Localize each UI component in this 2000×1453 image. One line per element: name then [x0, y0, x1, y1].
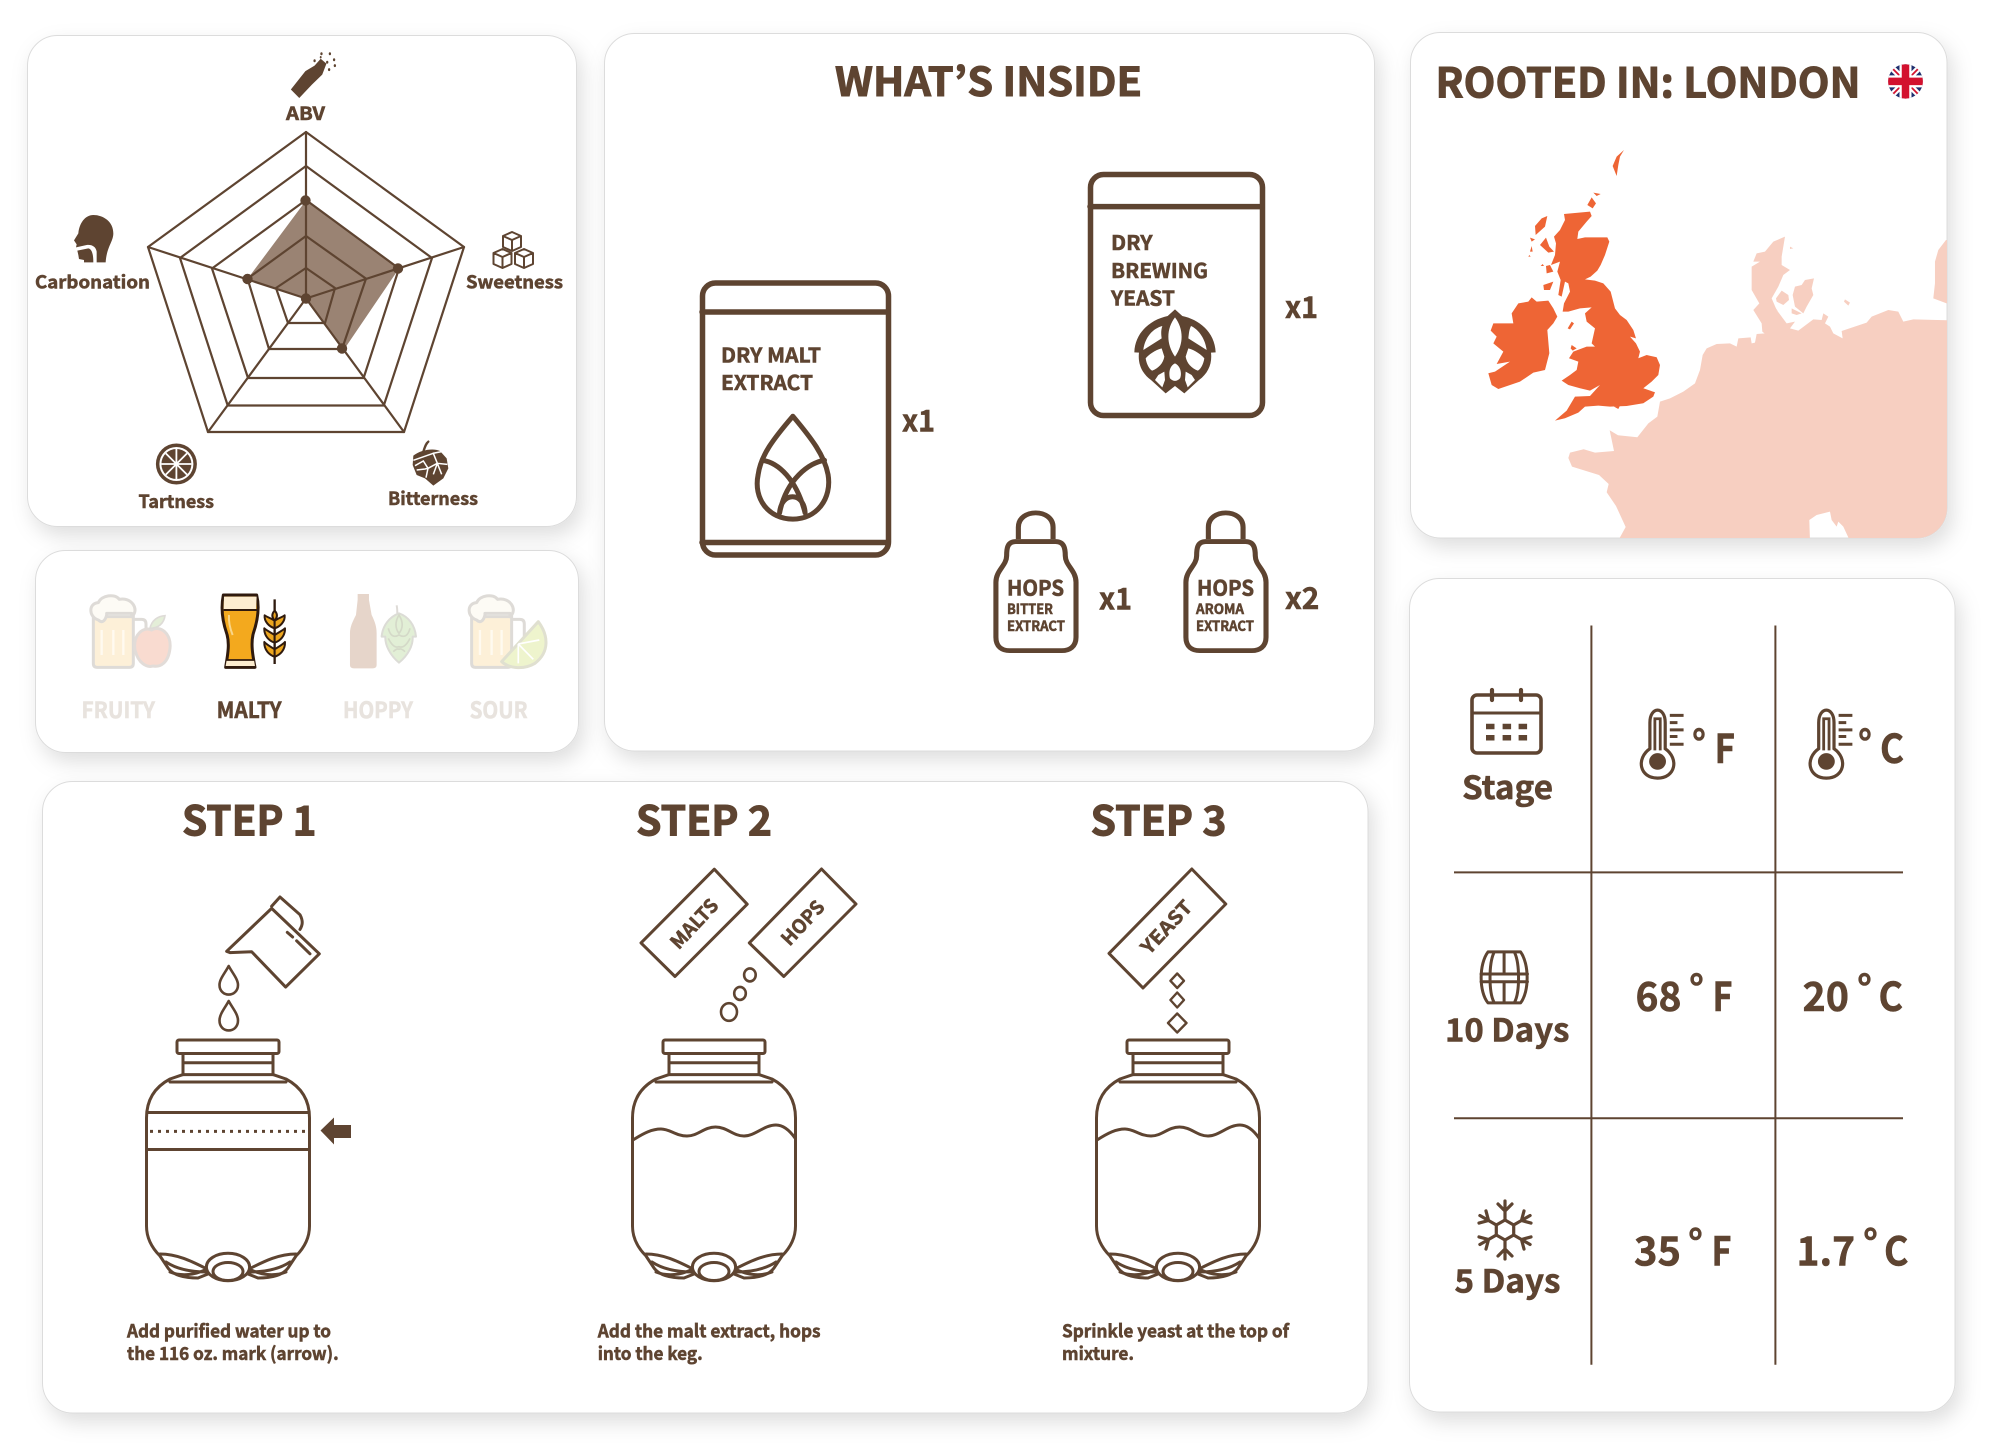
dry brewing yeast bag: DRY: [1111, 226, 1154, 256]
packet: malts: MALTS: [663, 892, 724, 954]
hops aroma extract bottle: EXTRACT: [1196, 616, 1254, 636]
hops aroma extract bottle: [1186, 513, 1266, 651]
label: Sweetness: Sweetness: [466, 268, 563, 294]
value: 35 F: [1634, 1212, 1732, 1277]
icon: citrus slice: [156, 444, 197, 484]
row: 10 days: [1445, 952, 1903, 1052]
packet: hops: [749, 869, 856, 976]
dry brewing yeast bag: BREWING: [1111, 254, 1208, 284]
step 3: [1062, 788, 1290, 1366]
value: 68 F: [1636, 958, 1732, 1023]
value: 35 F: 35: [1634, 1219, 1681, 1277]
keg: [146, 1040, 310, 1281]
dry malt extract bag: [702, 283, 888, 555]
quantity: x2: [1285, 574, 1319, 618]
step 1 instruction: Add purified water up to: [126, 1318, 331, 1344]
heading: step 3: STEP 3: [1090, 788, 1226, 848]
hops aroma extract bottle: HOPS: [1197, 573, 1254, 603]
value: 1.7 C: [1796, 1212, 1908, 1277]
label: Tartness: Tartness: [138, 488, 214, 514]
header: Stage: Stage: [1462, 763, 1553, 809]
label: SOUR: SOUR: [470, 693, 528, 725]
header: degrees Celsius: [1810, 710, 1904, 778]
label: ABV: ABV: [285, 100, 326, 126]
value: 20 C: C: [1878, 965, 1903, 1023]
quantity: x1: [902, 396, 935, 440]
step 2: [597, 788, 856, 1366]
step 2 instruction: [597, 1318, 821, 1366]
label: 10 Days: 10 Days: [1445, 1006, 1569, 1052]
packet: yeast: [1109, 869, 1226, 988]
icon: water drops: [220, 966, 238, 1030]
hops bitter extract bottle: EXTRACT: [1007, 616, 1065, 636]
step 1 instruction: the 116 oz. mark (arrow).: [127, 1340, 339, 1366]
value: 20 C: 20: [1802, 965, 1849, 1023]
value: 1.7 C: 1.7: [1796, 1219, 1855, 1277]
icon: hop outline: [1134, 309, 1216, 393]
quantity: x1: [1099, 574, 1132, 618]
hops bitter extract bottle: [996, 513, 1076, 651]
dry brewing yeast bag: [1090, 174, 1262, 416]
step 1: [126, 788, 351, 1366]
heading: rooted in London: ROOTED IN: LONDON: [1436, 50, 1860, 110]
value: 68 F: 68: [1636, 965, 1682, 1023]
header: degrees Celsius: °: [1858, 713, 1872, 771]
value: 20 C: °: [1857, 958, 1872, 1016]
label: HOPPY: HOPPY: [343, 693, 413, 725]
panel: brewing steps: [42, 782, 1368, 1413]
value: 35 F: °: [1688, 1212, 1703, 1270]
icon: malt drop: [757, 416, 829, 519]
icon: calendar: [1472, 690, 1541, 753]
label: MALTY: MALTY: [217, 693, 282, 725]
header: degrees Fahrenheit: [1641, 710, 1735, 778]
icon: snowflake: [1476, 1201, 1534, 1259]
step 2 instruction: Add the malt extract, hops: [597, 1318, 821, 1344]
quantity: x1: [1285, 283, 1318, 327]
UK and Ireland: [1488, 150, 1660, 421]
icon: fruity mug and apple: [91, 596, 170, 667]
header: degrees Fahrenheit: F: [1715, 717, 1735, 775]
icon: sour mug and lime: [469, 596, 546, 668]
step 3 instruction: mixture.: [1062, 1340, 1134, 1366]
step 1 instruction: [126, 1318, 339, 1366]
label: Bitterness: Bitterness: [388, 485, 478, 511]
icon: hop solid: [413, 442, 448, 486]
heading: step 1: STEP 1: [182, 788, 316, 848]
step 3 instruction: [1062, 1318, 1290, 1366]
packet: yeast: YEAST: [1133, 894, 1198, 960]
icon: ABV bottle: [291, 52, 336, 98]
label: Carbonation: Carbonation: [35, 268, 150, 294]
icon: pouring jug: [227, 897, 319, 987]
packet: malts: [641, 869, 747, 976]
value: 20 C: [1802, 958, 1903, 1023]
step 3 instruction: Sprinkle yeast at the top of: [1062, 1318, 1290, 1344]
heading: what's inside: WHAT’S INSIDE: [835, 50, 1142, 108]
radar chart: [148, 132, 464, 432]
keg: [1096, 1040, 1260, 1281]
header: degrees Celsius: C: [1880, 717, 1904, 775]
keg: [632, 1040, 796, 1281]
table grid lines: [1454, 626, 1903, 1365]
icon: falling pellets: [721, 968, 756, 1021]
dry malt extract bag: DRY MALT: [721, 339, 821, 369]
continental Europe: [1568, 237, 1960, 541]
icon: carbonation head: [74, 215, 113, 262]
hops aroma extract bottle: AROMA: [1195, 599, 1245, 619]
heading: step 2: STEP 2: [636, 788, 772, 848]
header: degrees Fahrenheit: °: [1692, 713, 1706, 771]
map: [1488, 150, 1960, 541]
hops bitter extract bottle: BITTER: [1007, 599, 1053, 619]
panel: rooted in London: [1410, 32, 1960, 541]
icon: thermometer: [1810, 710, 1852, 778]
row: 5 days: [1454, 1201, 1908, 1302]
dry brewing yeast bag: YEAST: [1110, 282, 1175, 312]
icon: hoppy bottle and hop: [350, 594, 416, 668]
arrow: fill mark: [320, 1118, 351, 1144]
icon: barrel: [1481, 952, 1527, 1003]
panel: beer style selector: [36, 550, 578, 752]
icon: yeast grains: [1168, 974, 1186, 1032]
step 2 instruction: into the keg.: [598, 1340, 703, 1366]
packet: hops: HOPS: [774, 894, 830, 951]
icon: sugar cubes: [494, 232, 533, 268]
panel: flavour radar chart: [28, 36, 576, 526]
value: 1.7 C: °: [1863, 1212, 1878, 1270]
label: 5 Days: 5 Days: [1454, 1256, 1560, 1302]
icon: thermometer: [1641, 710, 1684, 778]
icon: malty glass and wheat: [222, 595, 285, 667]
panel: fermentation schedule table: [1410, 578, 1955, 1412]
label: FRUITY: FRUITY: [82, 693, 155, 725]
hops bitter extract bottle: HOPS: [1007, 573, 1064, 603]
value: 68 F: °: [1689, 958, 1704, 1016]
dry malt extract bag: EXTRACT: [721, 366, 813, 396]
panel: what's inside: [604, 34, 1374, 751]
icon: UK flag: [1888, 64, 1923, 99]
value: 35 F: F: [1712, 1219, 1732, 1277]
value: 68 F: F: [1712, 965, 1732, 1023]
value: 1.7 C: C: [1884, 1219, 1908, 1277]
